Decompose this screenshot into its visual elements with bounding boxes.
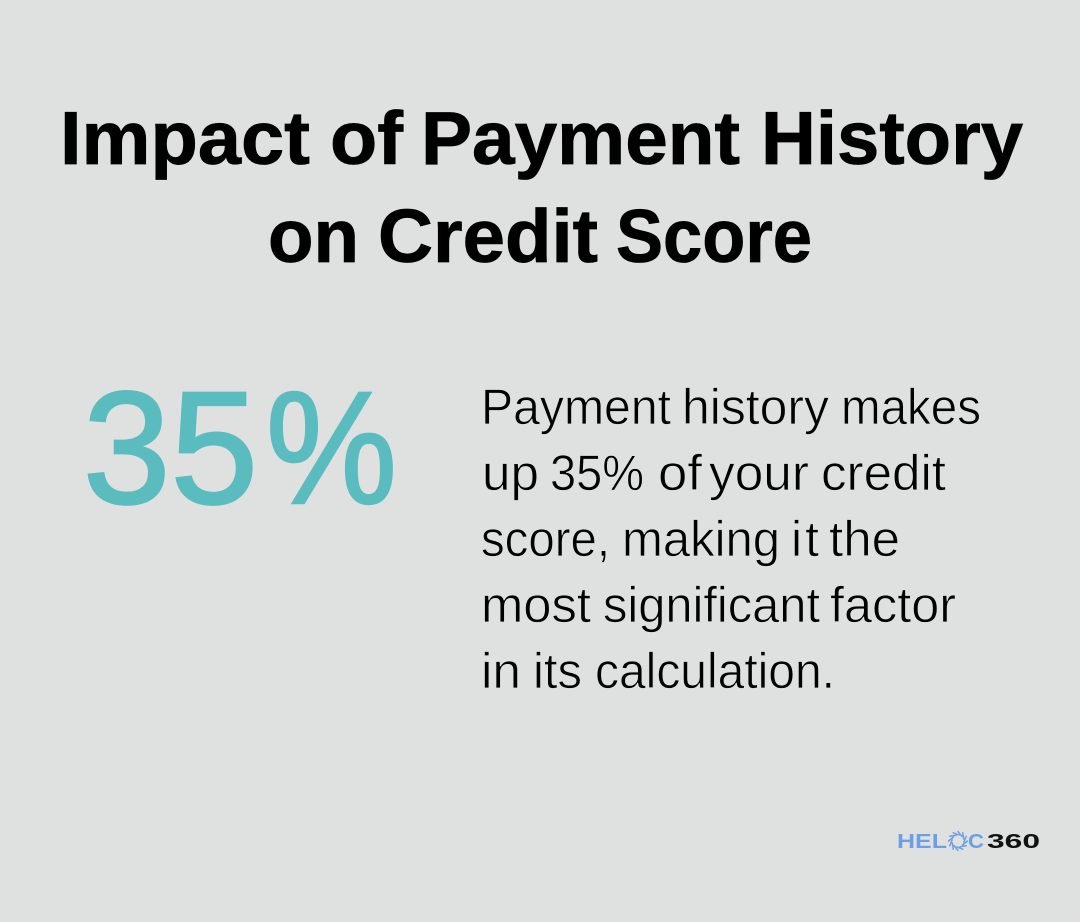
description text: up [482,445,539,501]
title: of [330,96,404,180]
logo wordmark: 360: 360 [987,830,1040,853]
big statistic: 35%: % [266,358,397,537]
description text: 35% [550,445,644,501]
description text: its [533,643,582,699]
title: on [268,194,359,278]
description text: Payment [481,379,671,435]
description text: the [829,511,900,567]
description text [481,379,981,699]
icon: logo swirl [948,831,968,851]
title: Credit [378,194,598,278]
description text: it [791,511,819,567]
description text: making [622,511,780,567]
logo wordmark: HEL: HEL [897,830,947,853]
title [60,96,1023,278]
description text: in [481,643,521,699]
title: History [761,96,1023,180]
description text: your [709,445,809,501]
description text: most [481,577,591,633]
description text: makes [841,379,981,435]
title: Score [616,194,812,278]
description text: credit [821,445,946,501]
logo wordmark: C: C [968,830,984,853]
title: Impact [60,96,310,180]
description text: significant [603,577,820,633]
description text: of [658,445,702,501]
description text: history [682,379,829,435]
description text: factor [830,577,956,633]
title: Payment [421,96,740,180]
description text: calculation. [595,643,835,699]
logo: HELOC360 [897,830,1040,853]
description text: score, [481,511,610,567]
big statistic: 35%: 35 [83,358,258,537]
